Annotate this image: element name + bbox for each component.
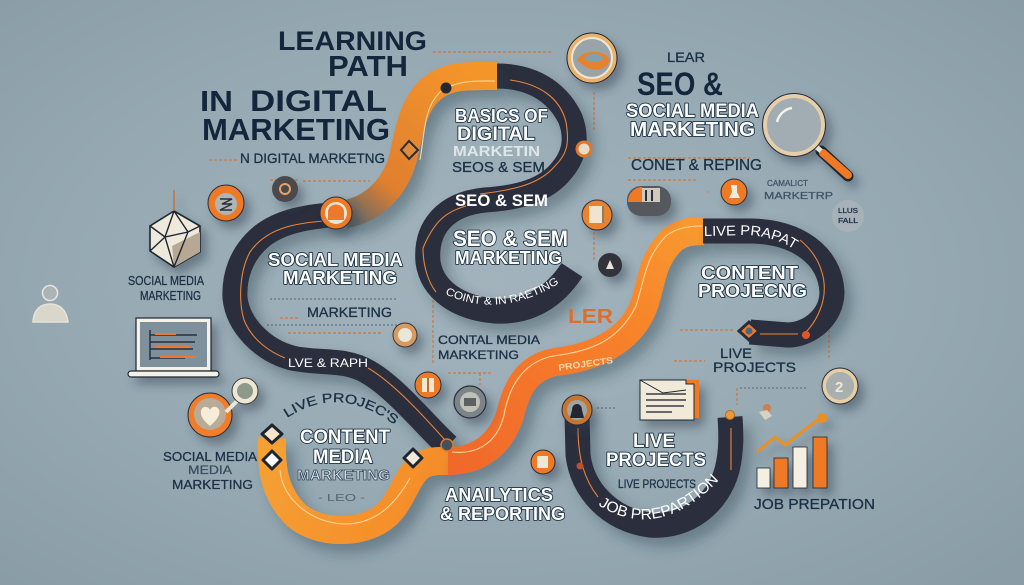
text: live projects right: PROJECTS xyxy=(713,359,796,375)
road centre lines xyxy=(241,80,824,524)
text: analytics & reporting: & REPORTING xyxy=(440,504,565,524)
text: content projecting: CONTENT xyxy=(701,263,798,283)
title: MARKETING xyxy=(202,112,390,147)
road: bottom-left orange U xyxy=(272,438,452,530)
text: basics of digital marketing xyxy=(452,106,548,176)
text: seo & social media marketing: MARKETING xyxy=(630,119,755,141)
text: seo & sem marketing: MARKETING xyxy=(455,248,562,268)
text: social media marketing lower left: MEDIA xyxy=(188,463,232,477)
text: social media marketing lower left xyxy=(163,449,257,492)
icon: badge beside road xyxy=(582,200,612,230)
text: live projects lower: LIVE xyxy=(633,431,675,452)
text: content media marketing lower: CONTENT xyxy=(300,427,390,448)
text: blurred marketing caption: MARKETRP xyxy=(764,191,833,202)
text: job preparation: JOB PREPATION xyxy=(754,496,875,513)
text: content projecting xyxy=(698,263,807,301)
text: content media marketing xyxy=(438,333,540,362)
road: centre orange section xyxy=(448,231,704,461)
text: basics of digital marketing: SEOS & SEM xyxy=(452,159,545,176)
text: social media marketing centre: SOCIAL MEDIA xyxy=(268,250,403,270)
text: content media marketing lower: - LEO - xyxy=(318,493,365,504)
icon: dark badge centre xyxy=(598,253,622,277)
bar chart xyxy=(757,413,827,488)
icon: gem xyxy=(150,190,200,267)
text: social media marketing lower left: MARKETING xyxy=(172,477,253,492)
road: right dark section xyxy=(703,231,832,335)
icon: grey caption circle xyxy=(832,200,864,232)
text: content media marketing: CONTAL MEDIA xyxy=(438,333,540,347)
text: live projects lower: PROJECTS xyxy=(606,450,706,471)
text: live projects lower: LIVE PROJECTS xyxy=(618,477,696,491)
text: content projecting: PROJECNG xyxy=(698,281,807,301)
text: analytics & reporting xyxy=(440,485,565,524)
icon: magnifying glass xyxy=(762,94,848,176)
text: content & reporting: CONET & REPING xyxy=(631,157,762,174)
text: content media marketing lower: MARKETING xyxy=(297,467,390,484)
text: content media marketing: MARKETING xyxy=(438,348,519,362)
icon: analytics badge xyxy=(531,450,555,474)
text: orange ler: LER xyxy=(568,306,614,328)
icon: numbered circle: 2 xyxy=(835,379,843,396)
text: live projects right xyxy=(713,345,796,375)
text: social media marketing centre xyxy=(268,250,403,288)
text: live projects lower xyxy=(606,431,706,491)
text: learn top right: LEAR xyxy=(667,49,705,65)
text: social media marketing left: MARKETING xyxy=(140,288,201,303)
icon: u-road markers xyxy=(262,322,810,470)
road: bottom dark U xyxy=(577,415,731,525)
text: content media marketing lower: MEDIA xyxy=(313,447,373,468)
text: analytics & reporting: ANAILYTICS xyxy=(445,485,553,505)
icon: small puzzle xyxy=(759,404,772,420)
icon: person road node xyxy=(562,395,592,425)
icon: document xyxy=(640,380,699,420)
road: dark left section xyxy=(235,214,448,446)
road: top orange section xyxy=(345,76,497,214)
icon: grey round badge xyxy=(454,386,486,418)
icon: orange badge right xyxy=(721,179,747,205)
text: basics of digital marketing: BASICS OF xyxy=(455,106,548,126)
icon: heart badge xyxy=(188,378,258,437)
icon: grey caption circle: LLUS xyxy=(838,208,858,215)
icon: pill badge xyxy=(627,186,671,216)
text: live projects arc: LIVE PROJEC'S xyxy=(283,393,398,424)
text: social media marketing left xyxy=(128,273,204,303)
title: PATH xyxy=(328,51,408,83)
icon: orange badge top left xyxy=(208,185,244,221)
text: seo & sem marketing: SEO & SEM xyxy=(453,226,568,251)
text: basics of digital marketing: DIGITAL xyxy=(457,124,535,145)
icon: u-road end marker xyxy=(726,410,734,420)
text: blurred marketing caption xyxy=(764,179,833,202)
path label: job preparation: JOB PREPARTION xyxy=(599,474,718,520)
icon: orange doc badge xyxy=(415,372,441,398)
icon: laptop xyxy=(128,318,219,377)
connector dashes xyxy=(209,52,829,408)
road: dark middle S section xyxy=(428,76,574,311)
icon: grey caption circle: FALL xyxy=(838,218,858,225)
text: marketing: MARKETING xyxy=(307,304,392,320)
text: live projects right: LIVE xyxy=(720,345,752,361)
path label: content marketing: COINT & IN RAETING xyxy=(446,278,558,305)
text: basics of digital marketing: MARKETIN xyxy=(453,143,540,160)
text: blurred marketing caption: CAMALICT xyxy=(767,179,808,188)
text: social media marketing lower left: SOCIAL MEDIA xyxy=(163,449,257,464)
subtitle: N DIGITAL MARKETNG xyxy=(240,150,385,166)
title: LEARNING xyxy=(278,26,427,56)
icon: top road markers xyxy=(401,82,591,451)
title xyxy=(200,26,427,147)
text: content media marketing lower xyxy=(297,427,390,504)
icon: orange road node xyxy=(320,197,352,229)
icon: numbered circle xyxy=(822,368,858,404)
text: seo & sem marketing xyxy=(453,226,568,268)
path label: projects on orange: PROJECTS xyxy=(558,355,614,373)
icon: glass lens top xyxy=(567,33,617,83)
title: IN xyxy=(200,86,233,118)
text: social media marketing centre: MARKETING xyxy=(283,268,397,288)
text: seo & social media marketing xyxy=(626,66,759,141)
text: seo & social media marketing: SOCIAL MEDIA xyxy=(626,101,759,122)
text: social media marketing left: SOCIAL MEDIA xyxy=(128,273,204,288)
icon: dark badge top left xyxy=(272,176,298,202)
icon: small tan badge xyxy=(393,323,417,347)
text: seo & social media marketing: SEO & xyxy=(637,66,723,102)
icon: person xyxy=(33,286,68,322)
path label: seo & sem: SEO & SEM xyxy=(455,191,548,210)
title: DIGITAL xyxy=(250,85,387,118)
path label: live & rapid: LVE & RAPH xyxy=(288,356,368,370)
